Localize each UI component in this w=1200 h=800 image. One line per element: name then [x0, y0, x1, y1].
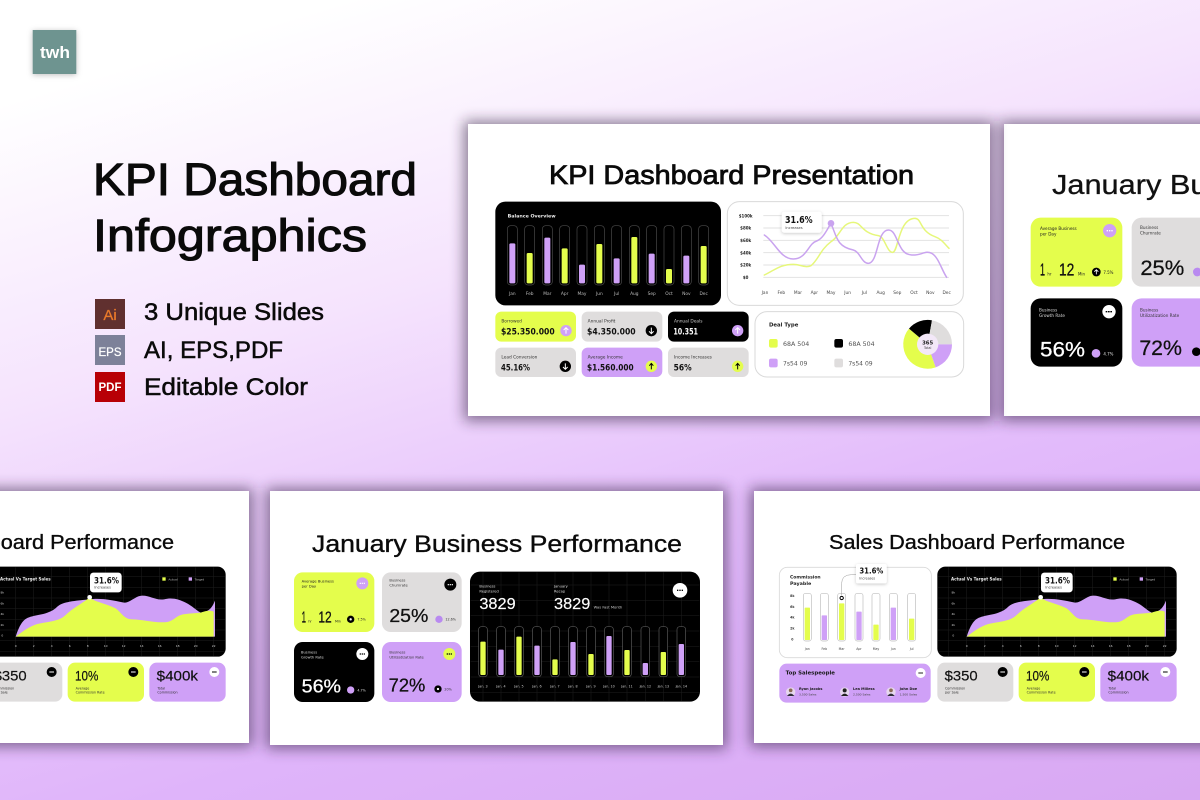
- card: total commission: $400k: [157, 668, 199, 684]
- main heading: [93, 154, 417, 261]
- panel: actual vs target area chart: 22: [1163, 644, 1167, 648]
- slide: January Business Performance: [266, 488, 727, 749]
- panel: actual vs target area chart: 8: [1038, 644, 1040, 648]
- panel: deal type donut: 68A 504: [848, 341, 875, 348]
- card: business utilization rate: 72%: [389, 674, 425, 695]
- panel: actual vs target area chart: 2k: [952, 623, 955, 627]
- chart: donut: [903, 320, 952, 369]
- panel: actual vs target area chart: Target: [1145, 577, 1156, 581]
- panel: daily business bar chart: Registered: [479, 590, 499, 594]
- avatar: John Doe: [886, 687, 896, 697]
- panel: line chart: Jul: [861, 290, 867, 296]
- panel: actual vs target area chart: 10: [104, 644, 108, 648]
- card: average commission rate: Average: [1027, 686, 1040, 690]
- card: borrowed: [495, 312, 576, 342]
- panel: balance overview bar chart: Jan: [508, 291, 516, 297]
- callout: 31.6% increases: 31.6%: [859, 566, 884, 576]
- card: business utilization rate: 72%: [1139, 336, 1182, 360]
- card: average commission rate: Commission Rate: [1027, 691, 1056, 695]
- panel: line chart: Jan: [761, 290, 769, 296]
- panel: actual vs target area chart: 16: [158, 644, 162, 648]
- panel: actual vs target area chart: 31.6%: [94, 576, 119, 586]
- panel: commission payable: 8k: [790, 594, 795, 598]
- panel: actual vs target area chart: [0, 567, 226, 657]
- card: business utilization rate: Utilizatization Rate: [389, 655, 425, 659]
- panel: actual vs target area chart: 0: [952, 634, 954, 638]
- slide: KPI Dashboard Presentation: [464, 121, 994, 421]
- panel: line chart: Oct: [910, 290, 918, 296]
- panel: balance overview bar chart: Balance Overview: [508, 213, 556, 219]
- card: annual deals: [668, 312, 749, 342]
- card: average business per day: [294, 572, 374, 632]
- panel: top salespeople: 2,500 Sales: [853, 693, 871, 697]
- panel: balance overview bar chart: Aug: [630, 291, 639, 297]
- card: average commission rate: Commission Rate: [76, 691, 105, 695]
- card: total commission: [149, 663, 226, 702]
- chart: donut: Total: [923, 346, 931, 350]
- panel: commission payable: Jan: [804, 647, 810, 651]
- panel: actual vs target area chart: 20: [1145, 644, 1149, 648]
- card: income increases: Income Increases: [674, 354, 713, 360]
- panel: actual vs target area chart: 6: [1020, 644, 1022, 648]
- card: total commission: [1100, 663, 1177, 702]
- panel: line chart: $0: [743, 275, 749, 280]
- panel: actual vs target area chart: 6k: [952, 601, 955, 605]
- panel: balance overview bar chart: Apr: [561, 291, 569, 297]
- card: average commission rate: [68, 663, 144, 702]
- card: business churnrate: Churnrate: [389, 583, 408, 587]
- card: business growth rate: Growth Rate: [301, 655, 325, 659]
- card: business utilization rate: Business: [1140, 308, 1158, 313]
- card: average income: $1.560.000: [587, 363, 634, 373]
- panel: deal type donut: Deal Type: [769, 323, 798, 329]
- panel: balance overview bar chart: May: [578, 291, 587, 297]
- panel: line chart: $40k: [740, 250, 751, 255]
- card: commission per sale: per Sale: [945, 691, 959, 695]
- card: lead conversion: Lead Conversion: [501, 354, 538, 360]
- panel: balance overview bar chart: Jul: [613, 291, 619, 297]
- card: total commission: Commission: [157, 691, 178, 695]
- panel: deal type donut: [755, 312, 964, 377]
- card: average business per day: 1: [1040, 260, 1045, 280]
- panel: balance overview bar chart: Sep: [648, 291, 656, 297]
- panel: top salespeople: [779, 664, 931, 703]
- panel: commission payable: Apr: [856, 647, 862, 651]
- panel: commission payable: [779, 564, 931, 658]
- avatar: Lea Milless: [840, 687, 849, 697]
- panel: actual vs target area chart: 4: [1002, 644, 1004, 648]
- panel: actual vs target area chart: 4: [51, 644, 53, 648]
- icon: EPS: EPS: [98, 347, 122, 359]
- card: total commission: Total: [156, 686, 165, 690]
- panel: daily business bar chart: January: [553, 584, 569, 588]
- panel: top salespeople: 1,500 Sales: [900, 693, 918, 697]
- icon: Adobe Illustrator: Ai: [103, 307, 117, 324]
- card: business churnrate: 25%: [389, 605, 428, 626]
- card: average commission rate: [1019, 663, 1095, 702]
- panel: top salespeople: John Doe: [899, 687, 918, 691]
- card: commission per sale: Commission: [945, 686, 965, 690]
- icon: PDF: [95, 372, 125, 402]
- slide: Dashboard Performance partial, bottom left: [0, 488, 253, 747]
- callout: 31.6% increases: Increases: [859, 576, 875, 580]
- panel: balance overview bar chart: Jun: [595, 291, 603, 297]
- panel: daily business bar chart: Jan. 11: [620, 685, 633, 689]
- card: business utilization rate: 20%: [444, 687, 452, 691]
- panel: actual vs target area chart: [937, 567, 1177, 657]
- card: average business per day: Min: [1078, 272, 1086, 277]
- icon: Adobe Illustrator: [95, 299, 125, 329]
- card: income increases: [668, 348, 749, 377]
- panel: commission payable: 2k: [790, 627, 795, 631]
- panel: daily business bar chart: Jan. 6: [531, 685, 542, 689]
- icon: EPS: [95, 335, 125, 365]
- panel: daily business bar chart: 3829: [554, 596, 590, 613]
- panel: daily business bar chart: Jan. 10: [602, 685, 615, 689]
- main heading: KPI Dashboard: [93, 154, 417, 205]
- icon: PDF: PDF: [98, 382, 122, 394]
- panel: top salespeople: Ryan Jacobs: [799, 687, 823, 691]
- panel: daily business bar chart: Was Fast Month: [594, 606, 622, 610]
- panel: actual vs target area chart: 0: [15, 644, 17, 648]
- panel: actual vs target area chart: Actual Vs Target Sales: [951, 576, 1002, 582]
- card: average business per day: per Day: [302, 584, 317, 588]
- panel: top salespeople: Lea Milless: [853, 687, 875, 691]
- card: business churnrate: Churnrate: [1140, 230, 1161, 235]
- panel: actual vs target area chart: 16: [1109, 644, 1113, 648]
- card: average business per day: 7.5%: [1103, 270, 1114, 275]
- panel: line chart: Dec: [942, 290, 951, 296]
- panel: commission payable: 0: [791, 638, 794, 642]
- card: annual deals: 10.351: [673, 328, 698, 338]
- avatar: Ryan Jacobs: [786, 687, 795, 697]
- panel: actual vs target area chart: Actual: [168, 577, 178, 581]
- card: average commission rate: Average: [76, 686, 89, 690]
- panel: commission payable: 4k: [790, 616, 795, 620]
- card: business utilization rate: Business: [389, 650, 406, 654]
- card: average commission rate: 10%: [75, 668, 98, 684]
- panel: actual vs target area chart: 4k: [952, 612, 955, 616]
- logo badge: [33, 30, 76, 74]
- panel: actual vs target area chart: Increases: [1045, 585, 1062, 589]
- card: average business per day: per Day: [1040, 231, 1057, 236]
- card: average business per day: hr: [308, 619, 312, 623]
- card: average business per day: Average Business: [302, 580, 334, 584]
- panel: daily business bar chart: Jan. 3: [477, 685, 488, 689]
- panel: daily business bar chart: 3829: [479, 596, 516, 613]
- panel: daily business bar chart: Jan. 14: [675, 685, 687, 689]
- panel: actual vs target area chart: 8: [87, 644, 89, 648]
- card: annual profit: $4.350.000: [587, 328, 636, 338]
- panel: actual vs target area chart: 2k: [1, 623, 4, 627]
- card: annual profit: Annual Profit: [588, 318, 616, 324]
- card: total commission: Commission: [1108, 691, 1129, 695]
- card: business growth rate: 4.7%: [1103, 351, 1114, 356]
- card: annual deals: Annual Deals: [674, 318, 703, 324]
- panel: actual vs target area chart: Increases: [94, 585, 111, 589]
- panel: commission payable: Commission: [790, 575, 821, 581]
- panel: line chart: May: [827, 290, 836, 296]
- logo badge: twh: [40, 43, 70, 62]
- main heading: Infographics: [93, 210, 367, 261]
- panel: daily business bar chart: Jan. 5: [513, 685, 524, 689]
- callout: 31.6% increases: [782, 212, 822, 233]
- panel: daily business bar chart: Jan. 13: [657, 685, 669, 689]
- card: business growth rate: Business: [1039, 308, 1057, 313]
- panel: line chart: $60k: [740, 238, 751, 243]
- callout: 31.6% increases: Increases: [785, 226, 803, 230]
- card: business churnrate: 25%: [1140, 256, 1184, 280]
- card: total commission: Total: [1107, 686, 1116, 690]
- panel: line chart: Nov: [926, 290, 935, 296]
- card: commission per sale: $350: [945, 668, 978, 684]
- panel: commission payable: Feb: [822, 647, 827, 651]
- panel: actual vs target area chart: 31.6%: [1045, 576, 1070, 586]
- panel: daily business bar chart: Business: [479, 585, 496, 589]
- panel: actual vs target area chart: 6k: [1, 601, 4, 605]
- feature: editable color: Editable Color: [144, 374, 308, 401]
- card: business churnrate: Business: [389, 579, 406, 583]
- card: total commission: $400k: [1108, 668, 1150, 684]
- card: business utilization rate: Utilizatization Rate: [1140, 313, 1180, 318]
- panel: line chart: $100k: [739, 213, 753, 218]
- panel: actual vs target area chart: 6: [69, 644, 71, 648]
- card: commission per sale: [0, 663, 62, 702]
- panel: commission payable: Jul: [909, 647, 914, 651]
- panel: deal type donut: 7s54 09: [848, 361, 873, 368]
- slide heading: Sales Dashboard Performance: [829, 532, 1125, 554]
- callout: 31.6% increases: 31.6%: [785, 215, 813, 226]
- panel: balance overview bar chart: [495, 202, 721, 305]
- panel: daily business bar chart: Recap: [554, 589, 566, 593]
- panel: balance overview bar chart: Nov: [682, 291, 691, 297]
- card: average business per day: hr: [1047, 272, 1052, 277]
- card: average business per day: 7.5%: [357, 618, 366, 622]
- panel: actual vs target area chart: Target: [194, 577, 205, 581]
- panel: actual vs target area chart: 8k: [952, 591, 955, 595]
- card: business growth rate: [1031, 298, 1122, 367]
- chart: donut: 365: [922, 340, 934, 346]
- panel: actual vs target area chart: 8k: [1, 591, 4, 595]
- panel: daily business bar chart: Jan. 12: [639, 685, 651, 689]
- panel: actual vs target area chart: 22: [212, 644, 216, 648]
- card: business growth rate: [294, 642, 374, 702]
- panel: actual vs target area chart: 14: [140, 644, 144, 648]
- card: business growth rate: 56%: [302, 676, 341, 697]
- feature list: [95, 299, 324, 402]
- card: business churnrate: Business: [1140, 225, 1158, 230]
- panel: actual vs target area chart: 2: [33, 644, 35, 648]
- card: business growth rate: Growth Rate: [1039, 313, 1065, 318]
- slide: Sales Dashboard Performance: [750, 488, 1200, 747]
- card: average business per day: Average Business: [1040, 226, 1077, 231]
- card: average business per day: Min: [335, 619, 341, 623]
- panel: actual vs target area chart: 12: [1073, 644, 1077, 648]
- panel: deal type donut: 68A 504: [783, 341, 810, 348]
- panel: daily business bar chart: Jan. 7: [549, 685, 560, 689]
- panel: commission payable: May: [873, 647, 879, 651]
- card: average business per day: 12: [318, 609, 332, 626]
- panel: balance overview bar chart: Oct: [665, 291, 673, 297]
- panel: actual vs target area chart: 10: [1055, 644, 1059, 648]
- card: average income: [582, 348, 662, 377]
- card: business growth rate: 4.7%: [357, 689, 366, 693]
- panel: actual vs target area chart: 20: [194, 644, 198, 648]
- panel: daily business bar chart: Jan. 4: [495, 685, 506, 689]
- card: lead conversion: 45.16%: [501, 363, 530, 373]
- panel: top salespeople: 3,500 Sales: [799, 693, 817, 697]
- feature: formats: AI, EPS,PDF: [144, 337, 283, 364]
- card: average business per day: 1: [302, 609, 306, 626]
- card: business growth rate: 56%: [1040, 338, 1085, 362]
- slide heading: KPI Dashboard Presentation: [549, 160, 914, 190]
- panel: line chart: Aug: [876, 290, 885, 296]
- panel: deal type donut: 7s54 09: [783, 361, 808, 368]
- panel: balance overview bar chart: Mar: [543, 291, 552, 297]
- card: income increases: 56%: [674, 363, 692, 373]
- card: business churnrate: [1132, 218, 1200, 287]
- card: average business per day: [1031, 218, 1122, 287]
- panel: actual vs target area chart: 0: [1, 634, 3, 638]
- panel: line chart: Mar: [794, 290, 802, 296]
- panel: actual vs target area chart: Actual Vs Target Sales: [0, 576, 51, 582]
- card: average commission rate: 10%: [1026, 668, 1049, 684]
- panel: line chart: $80k: [740, 226, 751, 231]
- panel: line chart: [727, 202, 963, 305]
- panel: actual vs target area chart: 0: [966, 644, 968, 648]
- panel: commission payable: Mar: [839, 647, 845, 651]
- panel: line chart: Jun: [843, 290, 851, 296]
- panel: balance overview bar chart: Feb: [526, 291, 534, 297]
- panel: daily business bar chart: Jan. 9: [585, 685, 596, 689]
- panel: line chart: $20k: [740, 263, 751, 268]
- panel: commission payable: Payable: [790, 581, 811, 587]
- feature: unique slides: 3 Unique Slides: [144, 299, 324, 326]
- card: business utilization rate: [382, 642, 462, 702]
- card: average business per day: 12: [1059, 260, 1074, 280]
- slide: January Business partial, top right: [1000, 121, 1200, 421]
- panel: daily business bar chart: [470, 572, 700, 702]
- card: business utilization rate: [1132, 298, 1200, 367]
- panel: actual vs target area chart: 14: [1091, 644, 1095, 648]
- card: business growth rate: Business: [301, 650, 317, 654]
- card: borrowed: $25.350.000: [501, 328, 555, 338]
- panel: actual vs target area chart: 18: [176, 644, 180, 648]
- panel: actual vs target area chart: Actual: [1119, 577, 1129, 581]
- panel: commission payable: 6k: [790, 605, 795, 609]
- slide heading: January Business Performance: [312, 531, 682, 558]
- card: borrowed: Borrowed: [501, 318, 522, 324]
- panel: top salespeople: Top Salespeople: [786, 671, 835, 677]
- card: annual profit: [582, 312, 662, 342]
- panel: daily business bar chart: Jan. 8: [567, 685, 578, 689]
- card: business churnrate: [382, 572, 462, 632]
- panel: line chart: Feb: [777, 290, 785, 296]
- panel: actual vs target area chart: 18: [1127, 644, 1131, 648]
- callout: 31.6% increases: [856, 564, 887, 583]
- panel: line chart: Sep: [893, 290, 902, 296]
- panel: actual vs target area chart: 12: [122, 644, 126, 648]
- panel: actual vs target area chart: 4k: [1, 612, 4, 616]
- card: commission per sale: [937, 663, 1013, 702]
- panel: balance overview bar chart: Dec: [699, 291, 708, 297]
- card: lead conversion: [495, 348, 576, 377]
- panel: commission payable: Jun: [890, 647, 896, 651]
- card: average income: Average Income: [588, 354, 623, 360]
- panel: actual vs target area chart: 2: [984, 644, 986, 648]
- panel: line chart: Apr: [811, 290, 818, 296]
- card: business churnrate: 12.6%: [445, 618, 456, 622]
